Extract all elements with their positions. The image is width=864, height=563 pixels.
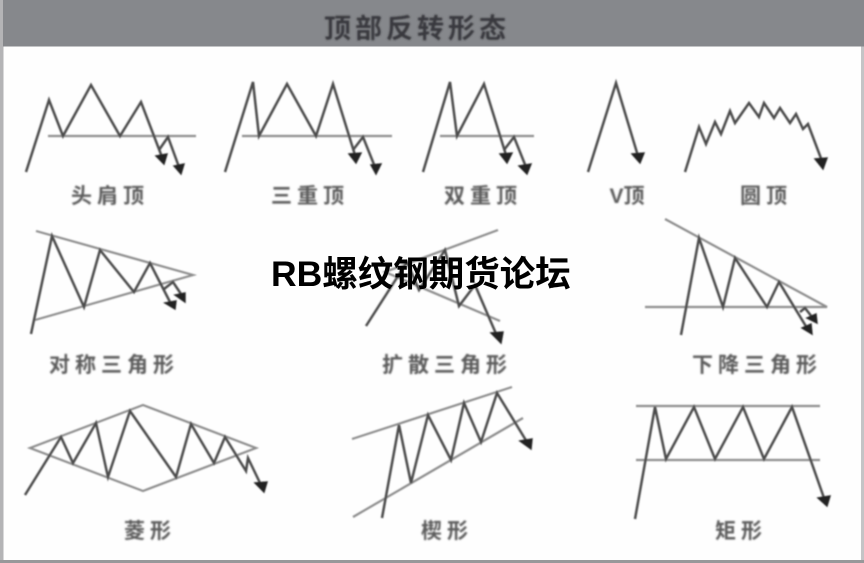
title: 顶部反转形态: [324, 14, 510, 44]
header band: [3, 0, 864, 46]
chart: diamond: 菱形: [124, 520, 176, 543]
chart: rectangle: [635, 406, 830, 543]
chart: head and shoulders top: 头肩顶: [71, 185, 149, 208]
chart: head and shoulders top: [26, 85, 196, 208]
chart: V top: V顶: [609, 185, 645, 208]
chart: rounded top: 圆顶: [740, 185, 792, 208]
chart: wedge: 楔形: [421, 520, 473, 543]
chart: wedge: [352, 387, 532, 543]
chart: broadening triangle: 扩散三角形: [382, 354, 512, 377]
chart: rectangle: 矩形: [715, 520, 767, 543]
chart: rounded top: [685, 103, 827, 208]
chart: symmetrical triangle: [31, 231, 193, 377]
chart: double top: 双重顶: [444, 185, 522, 208]
chart: triple top: [225, 82, 392, 208]
chart: double top: [423, 82, 534, 208]
chart: V top: [588, 83, 645, 208]
chart: descending triangle: 下降三角形: [692, 354, 822, 377]
chart: descending triangle: [645, 219, 827, 377]
chart: triple top: 三重顶: [271, 185, 349, 208]
watermark: RB螺纹钢期货论坛: [271, 254, 571, 294]
chart: symmetrical triangle: 对称三角形: [49, 354, 179, 377]
chart: diamond: [25, 405, 267, 543]
chart: broadening triangle: [366, 230, 512, 377]
